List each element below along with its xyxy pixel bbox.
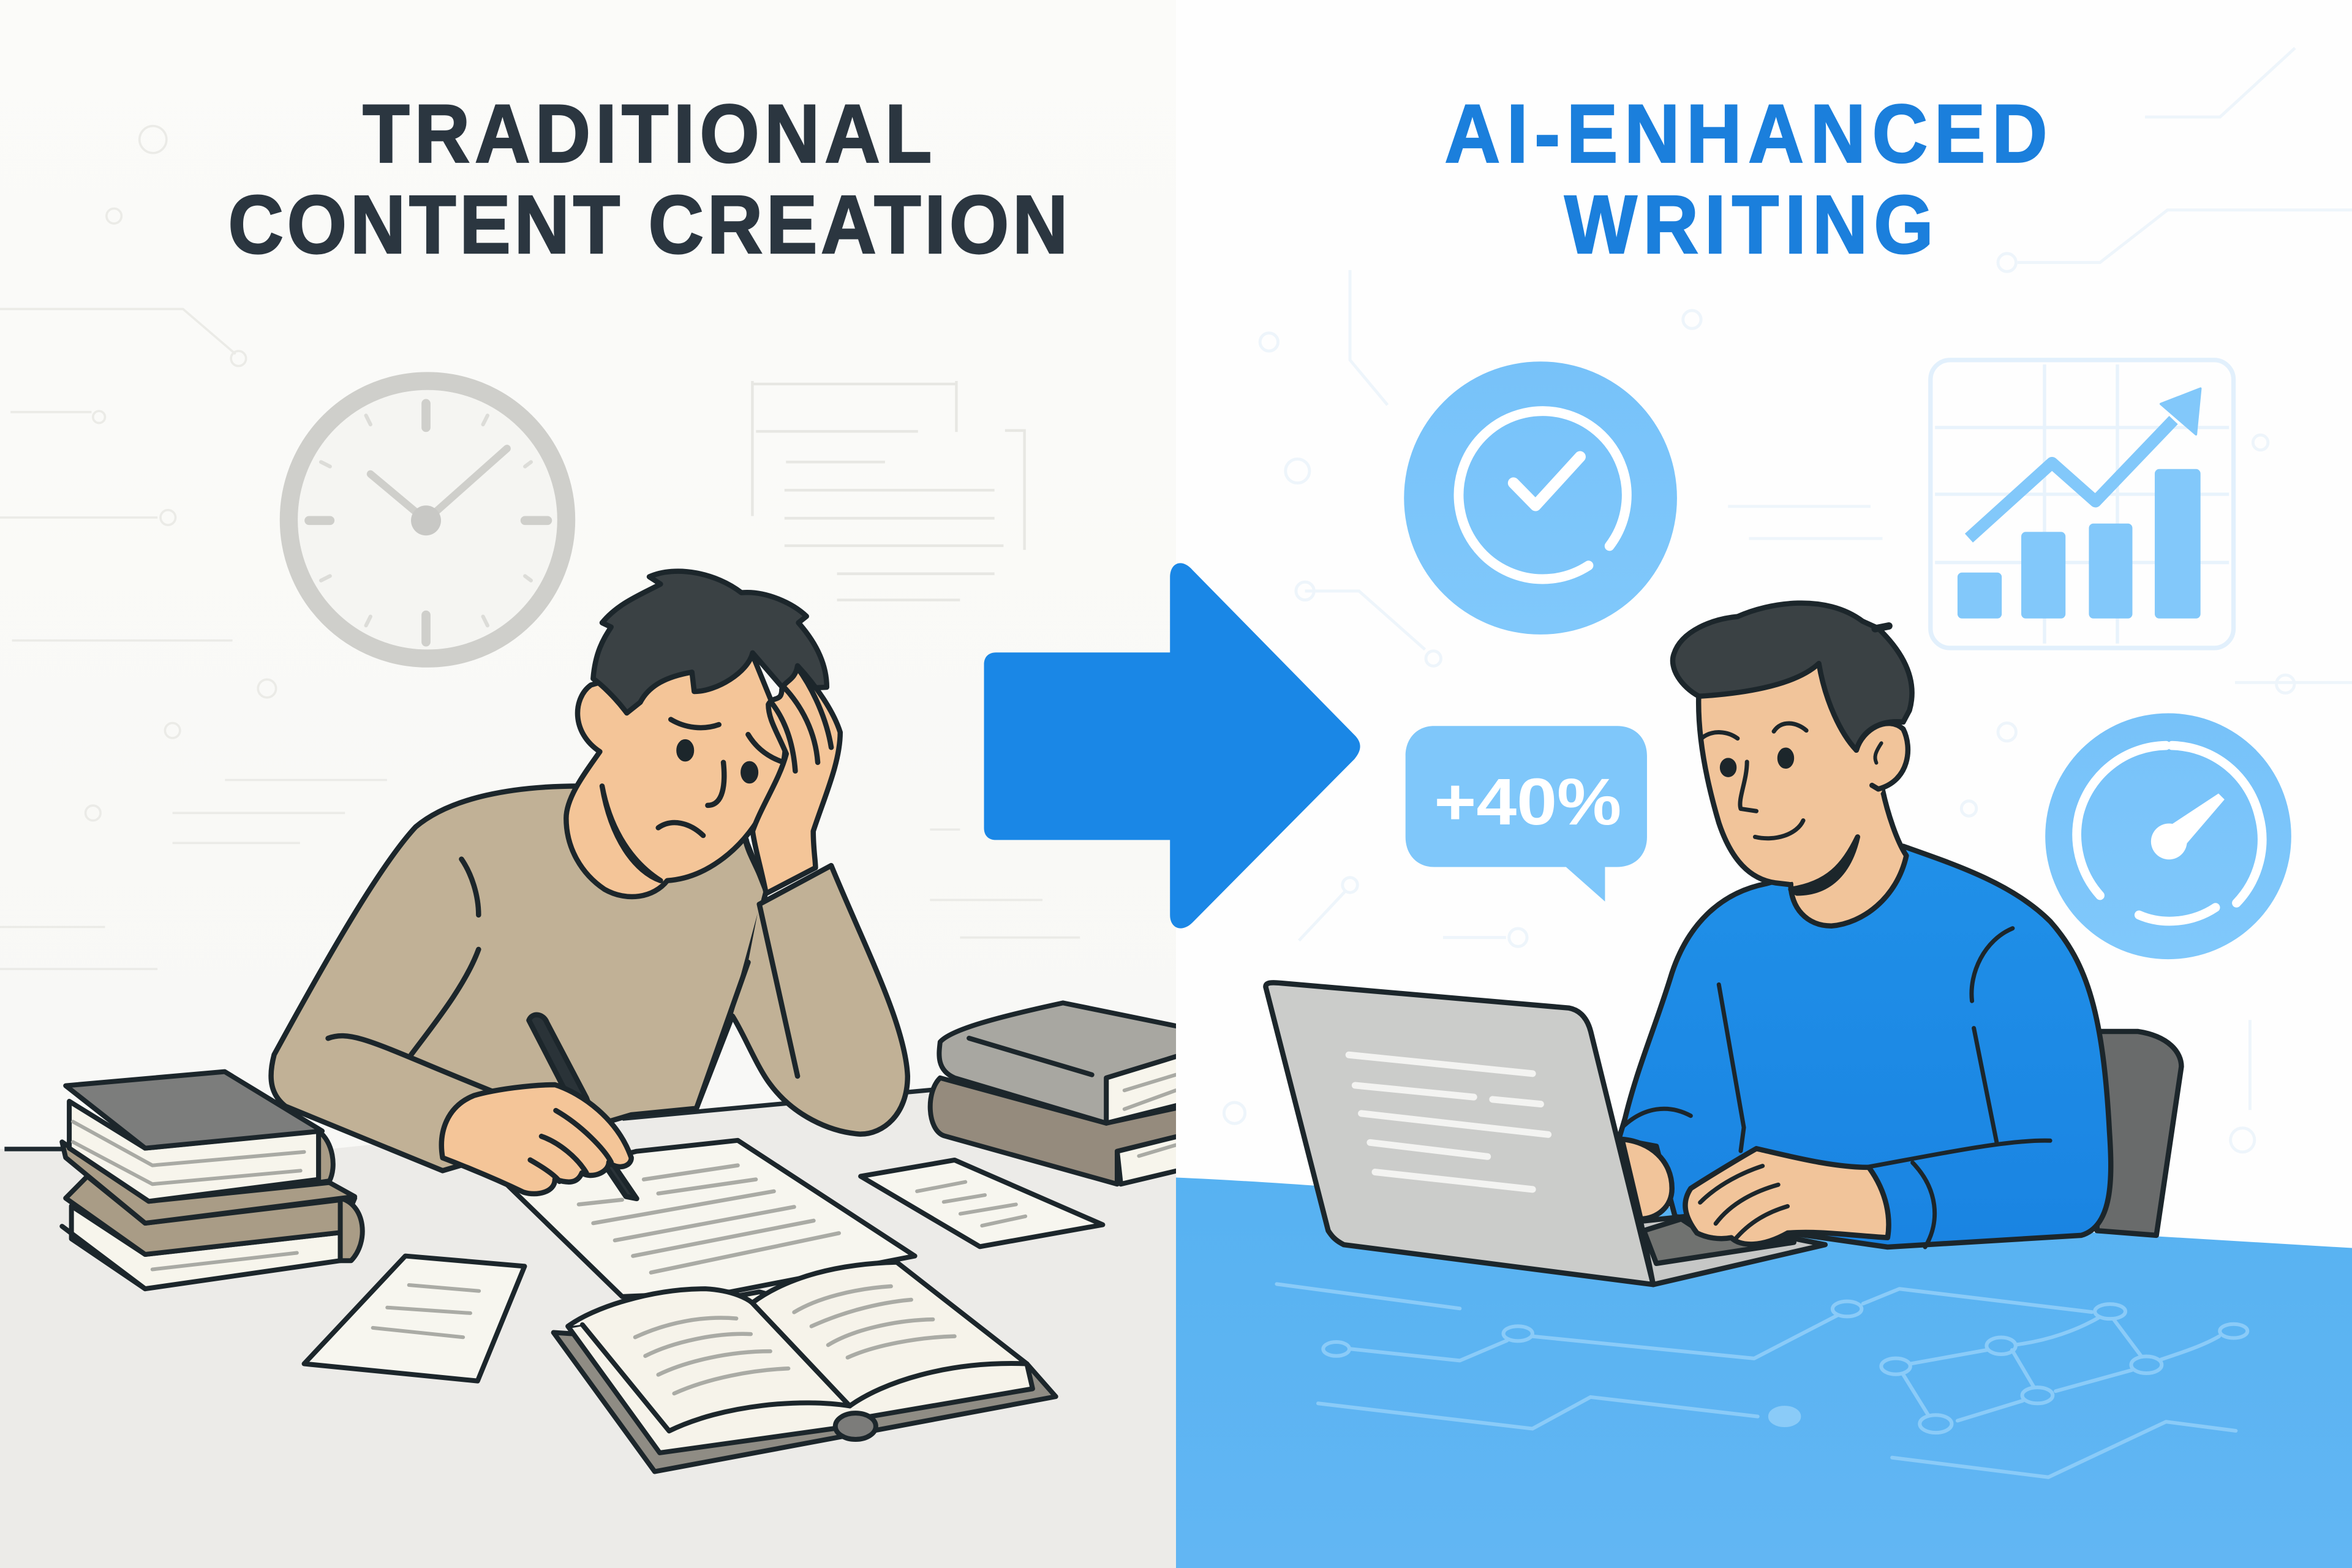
pen [529, 1015, 637, 1199]
illustration: happy writer [1265, 603, 2181, 1284]
chart panel [1931, 360, 2234, 648]
background circuit lines left [0, 126, 1080, 969]
middle cover [62, 1142, 355, 1223]
ear inner [1875, 743, 1882, 763]
bars [1958, 469, 2201, 619]
face details [658, 720, 784, 835]
left hand [1622, 1139, 1672, 1219]
sleeve outline [696, 865, 908, 1134]
hand [442, 1085, 631, 1194]
bottom book [72, 1206, 341, 1289]
finger lines [1700, 1166, 1788, 1240]
right page [752, 1262, 1027, 1406]
background circuit lines right [1224, 48, 2352, 1152]
icon: clock with check [1404, 361, 1677, 635]
paper: left note [304, 1256, 524, 1381]
sweater folds [1622, 929, 2050, 1247]
paper: right note [861, 1160, 1102, 1246]
desk edge line [4, 1085, 990, 1149]
trend arrow [1969, 420, 2174, 538]
title: traditional: CONTENT CREATION [228, 178, 1068, 271]
left page [568, 1289, 850, 1431]
text lines [635, 1286, 954, 1393]
desk right [1176, 1177, 2352, 1568]
neck shadow right [746, 840, 766, 889]
background document sketch [752, 381, 1025, 600]
arrow [984, 563, 1360, 929]
jaw shadow [602, 786, 660, 881]
sweater torso [271, 786, 766, 1170]
spine knob [835, 1413, 876, 1439]
blue sweater [1619, 846, 2111, 1247]
chair [2097, 1031, 2181, 1235]
title: traditional: TRADITIONAL [363, 87, 932, 179]
open book [554, 1262, 1056, 1472]
speech bubble +40%: +40% [1434, 764, 1621, 839]
book stack right [930, 1003, 1193, 1184]
right hand [1685, 1148, 1889, 1244]
title: AI-enhanced [1445, 87, 2048, 271]
ear [1856, 723, 1908, 789]
head and neck [566, 655, 785, 897]
gauge needle [2157, 794, 2225, 852]
keyboard [1644, 1219, 1794, 1264]
title: AI-enhanced: WRITING [1564, 178, 1934, 271]
icon: speedometer [2045, 713, 2291, 959]
desk circuit pattern [1276, 1284, 2247, 1477]
laptop base [1641, 1216, 1825, 1284]
gauge hub [2151, 823, 2187, 859]
face details [1702, 723, 1806, 839]
hair [1673, 603, 1912, 750]
desk left [0, 1068, 1176, 1568]
top book [69, 1101, 318, 1201]
laptop lid [1265, 982, 1653, 1284]
book stack left [62, 1072, 363, 1289]
hair [593, 571, 827, 713]
fingers [773, 668, 831, 771]
icon: wall clock [288, 381, 566, 658]
jaw outline [1698, 692, 1791, 884]
hand at head [753, 666, 840, 894]
neck shadow [1791, 837, 1858, 893]
title: traditional [228, 87, 1068, 271]
sleeve fill [733, 865, 908, 1134]
sweater folds [328, 859, 492, 1091]
panel: AI background [1176, 0, 2352, 1568]
screen text lines [1349, 1055, 1548, 1189]
speech bubble +40% [1406, 726, 1647, 902]
paper: writing sheet [507, 1140, 915, 1297]
hair tuft [1875, 626, 1889, 629]
title: AI-enhanced: AI-ENHANCED [1445, 87, 2048, 179]
page block [568, 1292, 1033, 1453]
hand with pen [442, 1015, 637, 1199]
illustration: stressed writer [271, 571, 908, 1170]
neck [1769, 790, 1906, 926]
cover [554, 1333, 1056, 1472]
finger lines [530, 1110, 611, 1182]
panel: traditional background [0, 0, 1176, 1568]
face fill [1698, 663, 1883, 883]
